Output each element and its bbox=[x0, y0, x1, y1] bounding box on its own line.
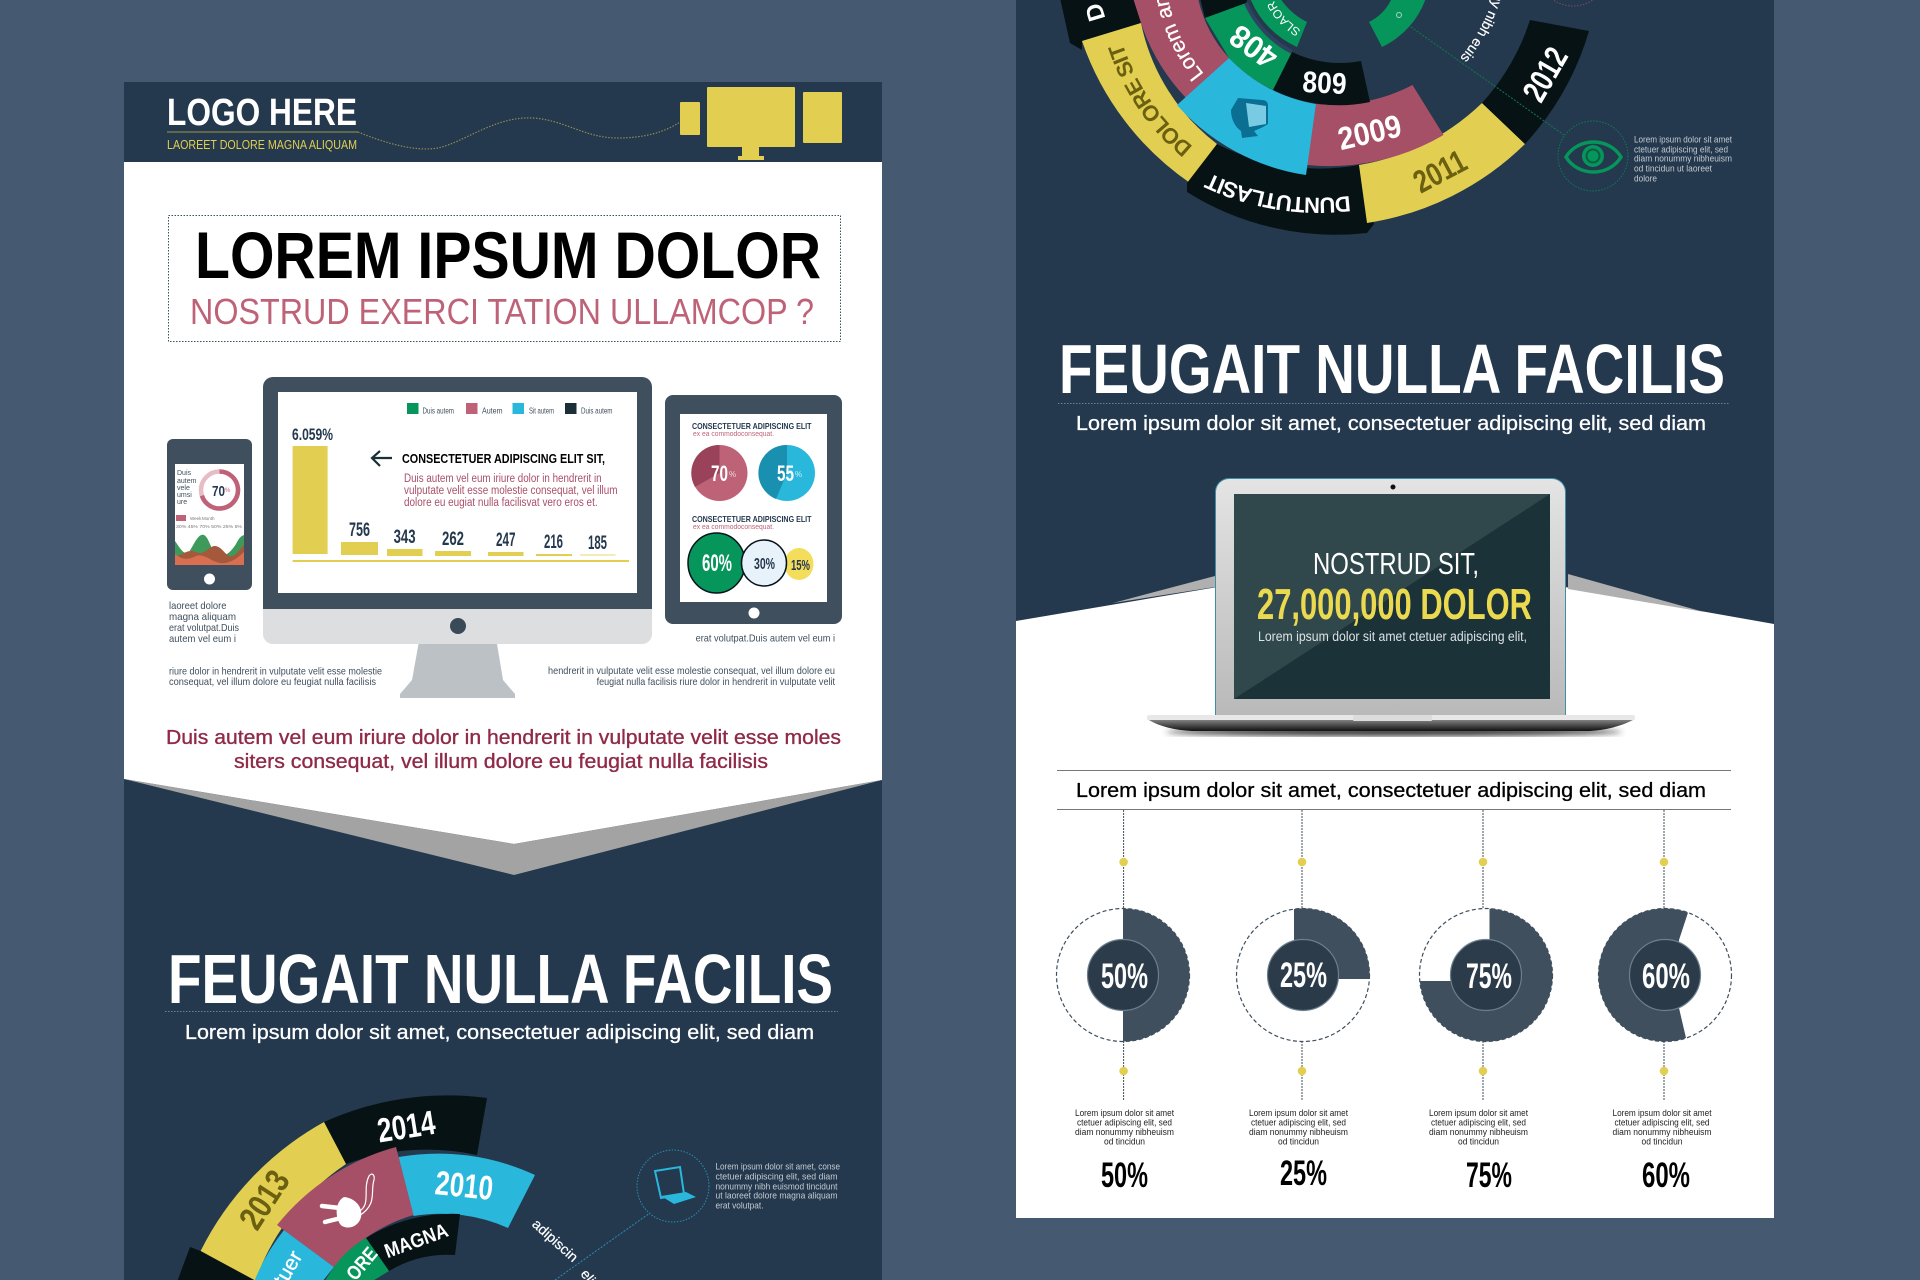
callout text: dolore bbox=[1634, 174, 1657, 184]
percentage labels: 75% bbox=[1466, 1156, 1512, 1195]
percentage labels bbox=[1101, 1154, 1690, 1195]
bar chart: 343 bbox=[394, 527, 416, 548]
phone caption bbox=[169, 600, 239, 645]
icon: laptop bbox=[637, 1150, 709, 1222]
heading: feugait right: Lorem ipsum dolor sit amet, consectetuer adipiscing elit, sed diam bbox=[1076, 413, 1706, 435]
column text 75%: diam nonummy nibheuism bbox=[1429, 1127, 1528, 1138]
segment black D bbox=[1060, 0, 1141, 50]
lower right caption: hendrerit in vulputate velit esse molestie consequat, vel illum dolore eu bbox=[548, 665, 835, 677]
phone text bbox=[177, 470, 197, 506]
heading: feugait right: FEUGAIT NULLA FACILIS bbox=[1059, 330, 1725, 408]
phone caption: erat volutpat.Duis bbox=[169, 622, 239, 634]
segment inner green left bbox=[1250, 0, 1307, 47]
bar chart bbox=[292, 425, 629, 562]
column text 25%: ctetuer adipiscing elit, sed bbox=[1251, 1118, 1346, 1128]
legend: Autem bbox=[482, 406, 503, 416]
radial chart: lower half bbox=[1060, 0, 1732, 235]
lower right caption bbox=[548, 665, 835, 688]
lower left caption bbox=[169, 666, 382, 688]
tablet heading 1: ex ea commodoconsequat. bbox=[693, 431, 774, 438]
donut 60% bbox=[1598, 810, 1732, 1100]
segment 2010: 2010 bbox=[433, 1164, 495, 1208]
monitor bbox=[263, 377, 652, 698]
legend: Duis autem bbox=[422, 406, 454, 416]
donut 70%: 70 bbox=[212, 483, 225, 500]
segment green ore bbox=[324, 1238, 389, 1280]
logo bbox=[167, 92, 358, 152]
callout text: ctetuer adipiscing elit, sed diam bbox=[716, 1172, 838, 1182]
column text 50%: Lorem ipsum dolor sit amet bbox=[1075, 1108, 1174, 1119]
segment inner green right bbox=[1369, 0, 1426, 47]
title box bbox=[168, 216, 840, 342]
legend: Duis autem bbox=[581, 406, 613, 416]
donut 50% bbox=[1056, 810, 1190, 1100]
callout text: Lorem ipsum dolor sit amet, conse bbox=[716, 1162, 840, 1172]
callout text: diam nonummy nibheuism bbox=[1634, 154, 1732, 164]
tablet caption: erat volutpat.Duis autem vel eum i bbox=[696, 632, 835, 644]
segment blue ctuer bbox=[254, 1230, 334, 1280]
segment 2014 bbox=[324, 1095, 487, 1164]
callout text: nonummy nibh euismod tincidunt bbox=[716, 1182, 838, 1192]
callout text: ut laoreet dolore magna aliquam bbox=[716, 1190, 838, 1202]
bar chart: 6.059% bbox=[292, 425, 333, 444]
column text 60%: od tincidun bbox=[1642, 1136, 1682, 1148]
phone caption: laoreet dolore bbox=[169, 600, 227, 612]
segment magna bbox=[366, 1214, 460, 1271]
segment 408: 408 bbox=[1223, 18, 1284, 76]
lower right caption: feugiat nulla facilisis riure dolor in hendrerit in vulputate velit bbox=[597, 676, 835, 688]
callout text bbox=[716, 1162, 840, 1212]
segment magna: MAGNA bbox=[382, 1220, 451, 1263]
laptop wings bbox=[1113, 574, 1704, 612]
segment 2010 bbox=[399, 1154, 535, 1228]
column text 75%: ctetuer adipiscing elit, sed bbox=[1431, 1118, 1526, 1128]
icon: yellow devices bbox=[680, 87, 842, 160]
bubble 30% bbox=[742, 540, 786, 586]
segment lorem am bbox=[1134, 0, 1229, 98]
callout text: ctetuer adipiscing elit, sed bbox=[1634, 144, 1728, 156]
callout text bbox=[1634, 134, 1732, 184]
heading: feugait left: FEUGAIT NULLA FACILIS bbox=[168, 940, 833, 1018]
segment rose plug bbox=[277, 1147, 414, 1267]
column text 75% bbox=[1429, 1108, 1528, 1148]
column text 50%: ctetuer adipiscing elit, sed bbox=[1077, 1118, 1172, 1128]
donut 75%: 75% bbox=[1466, 957, 1512, 996]
percentage labels: 60% bbox=[1642, 1156, 1690, 1195]
panel: right poster bbox=[1016, 0, 1774, 1218]
column text 60%: diam nonummy nibheuism bbox=[1612, 1127, 1712, 1138]
donut 60%: 60% bbox=[1642, 957, 1690, 996]
heading: feugait left: Lorem ipsum dolor sit amet, consectetuer adipiscing elit, sed diam bbox=[185, 1022, 814, 1044]
curved labels: adipiscin bbox=[529, 1216, 582, 1265]
lower left caption: riure dolor in hendrerit in vulputate velit esse molestie bbox=[169, 666, 382, 678]
leader line bbox=[1411, 27, 1564, 135]
tablet heading 1: CONSECTETUER ADIPISCING ELIT bbox=[692, 421, 812, 431]
segment 2011: 2011 bbox=[1407, 142, 1473, 200]
legend bbox=[407, 403, 613, 416]
icon: eye bbox=[1558, 121, 1628, 191]
column text 25% bbox=[1249, 1108, 1348, 1148]
monitor text block: Duis autem vel eum iriure dolor in hendrerit in bbox=[404, 473, 602, 485]
logo: LOGO HERE bbox=[167, 92, 357, 134]
phone text: umsi bbox=[177, 492, 192, 499]
segment 2012 bbox=[1482, 20, 1589, 144]
column text 50% bbox=[1075, 1108, 1174, 1148]
laptop screen: Lorem ipsum dolor sit amet ctetuer adipiscing elit, bbox=[1258, 629, 1527, 644]
percentage labels: 25% bbox=[1280, 1154, 1327, 1193]
bubble 30%: 30% bbox=[754, 556, 775, 573]
column text 75%: Lorem ipsum dolor sit amet bbox=[1429, 1108, 1528, 1119]
pie 70% bbox=[691, 445, 748, 501]
column text 25%: diam nonummy nibheuism bbox=[1249, 1127, 1348, 1138]
segment 408 bbox=[1205, 3, 1292, 90]
rose statement: Duis autem vel eum iriure dolor in hendrerit in vulputate velit esse moles bbox=[166, 727, 841, 749]
segment dolore sit bbox=[1082, 23, 1217, 182]
tablet heading 2: ex ea commodoconsequat. bbox=[693, 524, 774, 531]
donut 50%: 50% bbox=[1101, 957, 1148, 996]
main title: LOREM IPSUM DOLOR bbox=[195, 218, 821, 292]
heading: feugait left bbox=[165, 940, 838, 1044]
pie 55%: % bbox=[795, 470, 802, 479]
chevron shadow bbox=[124, 779, 882, 875]
callout text: od tincidun ut laoreet bbox=[1634, 164, 1712, 174]
pie 70%: 70 bbox=[711, 461, 728, 486]
segment top black bbox=[1200, 0, 1248, 18]
donut 75% bbox=[1420, 810, 1553, 1100]
segment dolore sit: DOLORE SIT bbox=[1108, 47, 1192, 157]
segment inner green left: SLAOR bbox=[1268, 0, 1300, 36]
monitor text block: CONSECTETUER ADIPISCING ELIT SIT, bbox=[402, 451, 605, 466]
leader line bbox=[555, 1213, 650, 1280]
legend: Sit autem bbox=[529, 406, 554, 416]
monitor text block: vulputate velit esse molestie consequat, vel illum bbox=[404, 485, 618, 497]
tablet bbox=[665, 395, 842, 624]
phone caption: magna aliquam bbox=[169, 611, 236, 623]
section heading: Lorem ipsum dolor sit amet, consectetuer adipiscing elit, sed diam bbox=[1076, 780, 1706, 802]
segment 2013: 2013 bbox=[232, 1164, 298, 1236]
bubble 60%: 60% bbox=[702, 550, 732, 577]
bar chart: 756 bbox=[349, 520, 370, 541]
phone bbox=[167, 439, 252, 590]
segment blue monitor bbox=[1177, 58, 1316, 175]
segment duntutlasit: DUNTUTLASIT bbox=[1204, 175, 1350, 213]
bubble 15%: 15% bbox=[791, 557, 810, 574]
donut 25% bbox=[1236, 810, 1370, 1100]
tablet heading 2: CONSECTETUER ADIPISCING ELIT bbox=[692, 514, 812, 524]
laptop bbox=[1147, 478, 1635, 736]
phone caption: autem vel eum i bbox=[169, 633, 236, 645]
area chart bbox=[175, 535, 244, 565]
faint circle bbox=[1537, 0, 1609, 6]
segment 809: 809 bbox=[1302, 66, 1347, 101]
header bar bbox=[124, 82, 882, 162]
bubble 60% bbox=[688, 533, 745, 593]
icon: plug bbox=[322, 1174, 374, 1228]
monitor text block: dolore eu eugiat nulla facilisvat vero eros et. bbox=[404, 497, 598, 509]
callout text: erat volutpat. bbox=[716, 1200, 764, 1212]
bar chart: 262 bbox=[442, 529, 464, 550]
column text 25%: od tincidun bbox=[1278, 1136, 1319, 1148]
icon: monitor bbox=[1231, 98, 1268, 138]
radial chart: upper half bbox=[177, 1095, 840, 1280]
column text 60%: Lorem ipsum dolor sit amet bbox=[1612, 1108, 1712, 1119]
segment 2012: 2012 bbox=[1515, 41, 1575, 108]
monitor text block bbox=[402, 451, 618, 509]
donut 25%: 25% bbox=[1280, 956, 1327, 995]
logo: LAOREET DOLORE MAGNA ALIQUAM bbox=[167, 138, 357, 152]
segment 2009: 2009 bbox=[1334, 108, 1405, 157]
column text 50%: od tincidun bbox=[1104, 1136, 1145, 1148]
subtitle: NOSTRUD EXERCI TATION ULLAMCOP ? bbox=[190, 291, 814, 332]
phone text: Duis bbox=[177, 470, 192, 477]
arrow bbox=[372, 451, 392, 466]
segment 2009 bbox=[1307, 85, 1444, 166]
tabs: Month bbox=[202, 516, 215, 521]
tablet heading 1 bbox=[692, 421, 812, 438]
callout text: Lorem ipsum dolor sit amet bbox=[1634, 134, 1732, 146]
phone text: ure bbox=[177, 499, 187, 506]
bar chart: 185 bbox=[588, 533, 607, 554]
laptop screen: 27,000,000 DOLOR bbox=[1257, 580, 1532, 629]
pie 55%: 55 bbox=[777, 461, 794, 486]
rose statement bbox=[166, 727, 841, 773]
panel: left poster bbox=[124, 82, 882, 1280]
rose statement: siters consequat, vel illum dolore eu feugiat nulla facilisis bbox=[234, 751, 768, 773]
segment black D: D bbox=[1080, 0, 1111, 24]
pie 70%: % bbox=[729, 470, 736, 479]
column text 25%: Lorem ipsum dolor sit amet bbox=[1249, 1108, 1348, 1119]
column text 50%: diam nonummy nibheuism bbox=[1075, 1127, 1174, 1138]
curved labels bbox=[529, 1216, 601, 1280]
donut 70% bbox=[201, 472, 238, 508]
segment 2014: 2014 bbox=[375, 1104, 438, 1150]
segment 2011 bbox=[1359, 103, 1525, 223]
laptop screen bbox=[1234, 494, 1550, 699]
tablet heading 2 bbox=[692, 514, 812, 531]
percentage labels: 50% bbox=[1101, 1156, 1148, 1195]
column text 60%: ctetuer adipiscing elit, sed bbox=[1614, 1118, 1710, 1128]
heading: feugait right bbox=[1058, 330, 1729, 435]
column text 75%: od tincidun bbox=[1458, 1136, 1499, 1148]
segment duntutlasit bbox=[1187, 144, 1374, 235]
bar chart: 216 bbox=[544, 532, 563, 553]
tabs: Week bbox=[190, 516, 202, 521]
donut 70%: % bbox=[225, 488, 231, 494]
pie 55% bbox=[758, 445, 815, 501]
segment 809 bbox=[1273, 52, 1370, 105]
phone text: autem bbox=[177, 478, 197, 485]
band between inner rings bbox=[1246, 3, 1292, 52]
laptop screen: NOSTRUD SIT, bbox=[1313, 546, 1479, 581]
lower left caption: consequat, vel illum dolore eu feugiat nulla facilisis bbox=[169, 676, 376, 688]
bar chart: 247 bbox=[496, 530, 516, 551]
tabs bbox=[176, 515, 242, 529]
phone text: vele bbox=[177, 485, 190, 492]
tabs: 30% 45% 70% 50% 25% 5% bbox=[176, 524, 242, 529]
column text 60% bbox=[1612, 1108, 1712, 1148]
segment lower left black bbox=[177, 1247, 258, 1280]
segment 2013 bbox=[201, 1122, 346, 1280]
bubble 15% bbox=[784, 548, 814, 580]
